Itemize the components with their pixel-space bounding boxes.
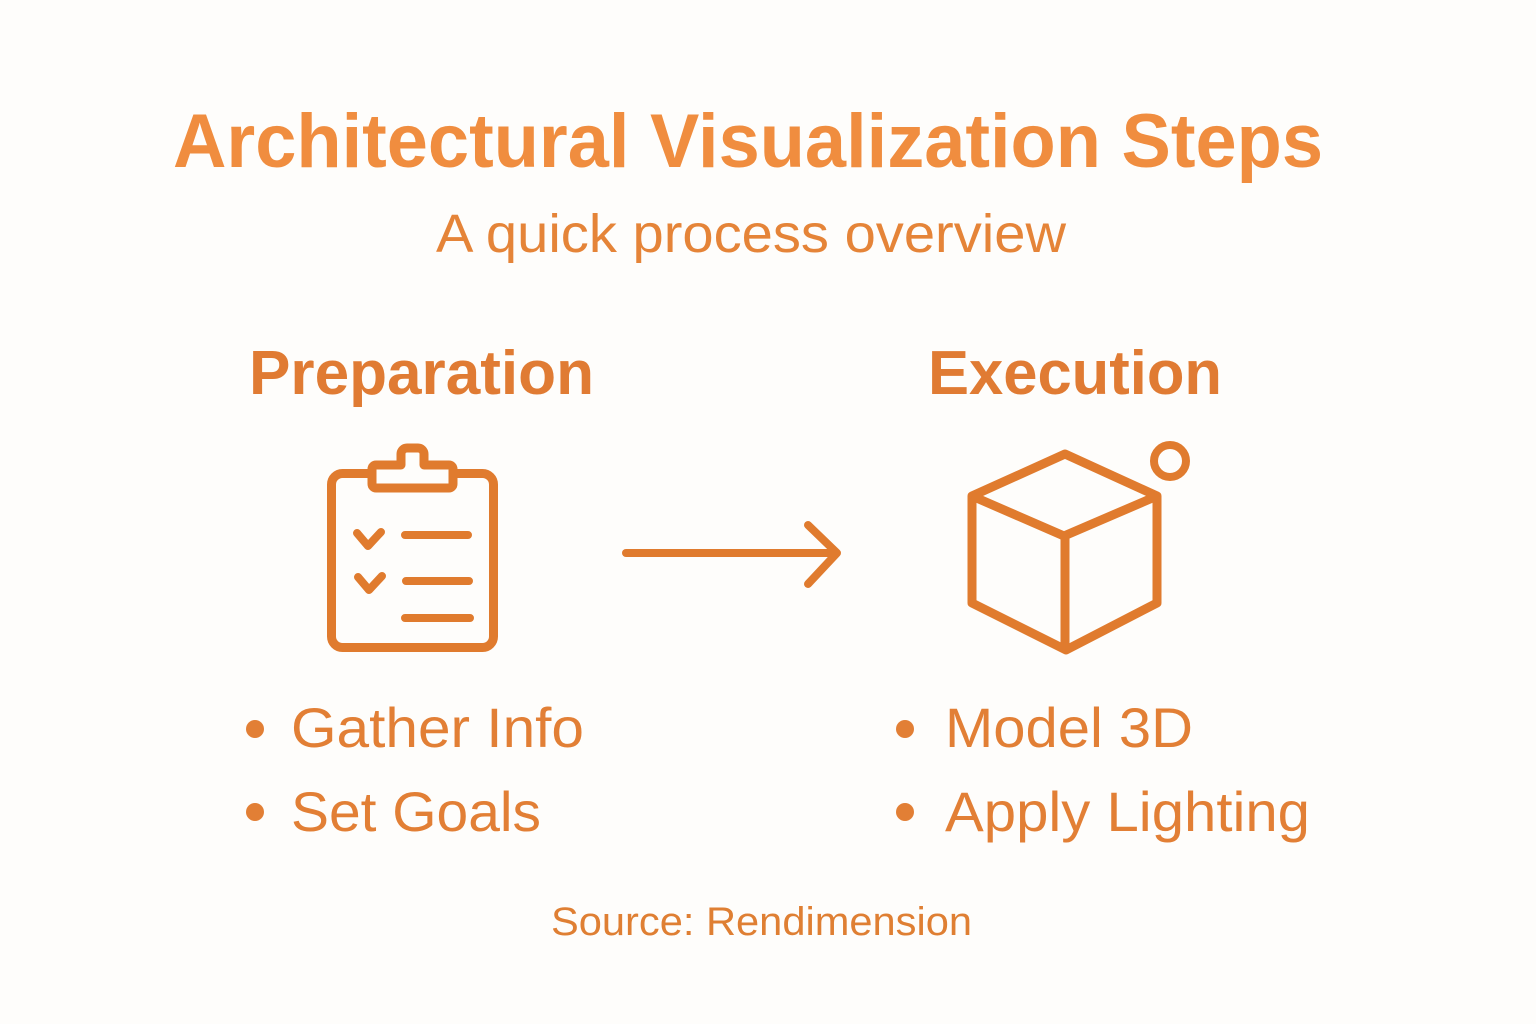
panel: preparation <box>246 339 594 843</box>
source note: Source: Rendimension <box>551 900 972 944</box>
list: execution bullets <box>896 696 1310 843</box>
bullet item: apply lighting: Apply Lighting <box>945 780 1310 843</box>
icon: 3D cube with circle <box>972 445 1186 650</box>
arrow: preparation to execution <box>626 525 837 584</box>
list: preparation bullets <box>246 696 584 843</box>
icon: clipboard checklist <box>332 448 494 648</box>
heading: preparation: Preparation <box>249 339 594 408</box>
subtitle: A quick process overview <box>436 204 1067 264</box>
bullet item: model 3D: Model 3D <box>945 696 1193 759</box>
title: Architectural Visualization Steps <box>173 99 1323 184</box>
bullet item: set goals: Set Goals <box>291 780 541 843</box>
bullet item: gather info: Gather Info <box>291 696 584 759</box>
panel: execution <box>896 339 1310 843</box>
heading: execution: Execution <box>928 339 1222 408</box>
